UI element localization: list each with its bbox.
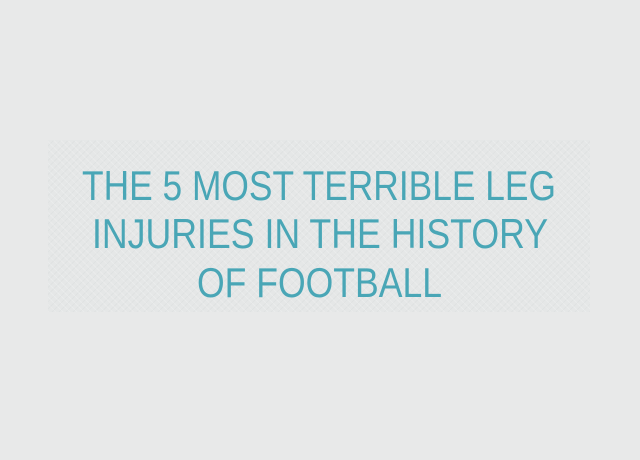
title: OF FOOTBALL [197,259,442,306]
title: THE 5 MOST TERRIBLE LEG [82,162,556,209]
panel: title background [48,140,590,312]
title: INJURIES IN THE HISTORY [92,210,548,257]
